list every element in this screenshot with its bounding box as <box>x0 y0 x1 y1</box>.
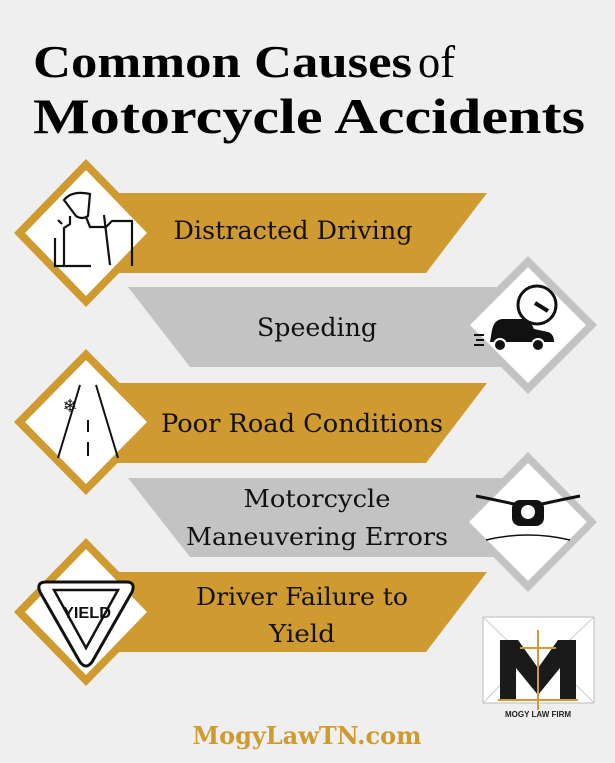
icon: road with snowflake <box>14 349 158 495</box>
title: of <box>418 36 456 87</box>
icon: yield sign: YIELD <box>63 605 111 622</box>
icon: speeding car <box>459 256 597 394</box>
title <box>33 36 585 144</box>
panel: failure to yield: Yield <box>268 620 335 648</box>
panel: maneuvering errors: Maneuvering Errors <box>186 523 448 551</box>
icon: distracted driver <box>14 159 158 307</box>
panel: speeding <box>128 256 597 394</box>
icon: yield sign <box>14 538 158 686</box>
panel: poor road conditions: Poor Road Conditions <box>161 409 443 438</box>
logo: MOGY LAW FIRM <box>505 710 571 719</box>
panel: speeding: Speeding <box>257 313 377 342</box>
icon: road with snowflake: ❄ <box>62 396 78 417</box>
logo <box>483 617 594 719</box>
icon: motorcycle <box>459 452 597 592</box>
title: Common Causes <box>33 36 412 87</box>
website: MogyLawTN.com <box>192 721 422 750</box>
panel: failure to yield <box>14 538 487 686</box>
panel: distracted driving <box>14 159 487 307</box>
panel: failure to yield: Driver Failure to <box>196 583 408 611</box>
panel: poor road conditions <box>14 349 487 495</box>
panel: maneuvering errors <box>128 452 597 592</box>
panel: distracted driving: Distracted Driving <box>174 216 412 245</box>
panel: maneuvering errors: Motorcycle <box>244 485 390 513</box>
title: Motorcycle Accidents <box>33 88 585 144</box>
